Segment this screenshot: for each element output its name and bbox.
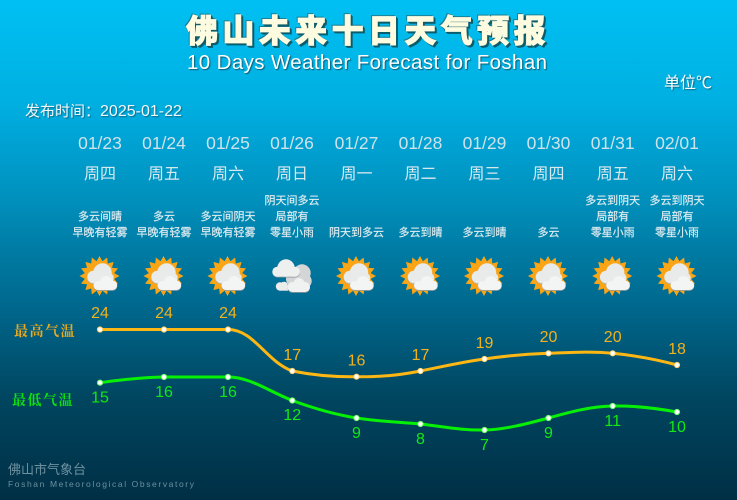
weekday: 周二	[404, 160, 437, 184]
weather description: 多云到阴天	[650, 192, 704, 208]
panel: day 5	[329, 133, 384, 296]
panel: day 4	[264, 133, 320, 293]
panel: day 10	[650, 133, 704, 296]
line chart: min temperature	[91, 374, 686, 454]
weather description: 早晚有轻雾	[200, 224, 256, 240]
min temperature values: 11	[604, 413, 621, 430]
publish time: 发布时间：2025-01-22	[25, 103, 182, 120]
weather description: 阴天到多云	[329, 224, 384, 240]
panel: day 2	[136, 133, 192, 296]
subtitle: 10 Days Weather Forecast for Foshan	[187, 51, 547, 74]
min temperature values: 16	[155, 384, 173, 401]
panel: day 6	[398, 133, 442, 296]
unit label: 单位℃	[664, 69, 712, 93]
max temperature values: 20	[540, 329, 558, 346]
weekday: 周五	[597, 160, 629, 184]
weather description: 早晚有轻雾	[72, 224, 128, 240]
panel: day 8	[527, 133, 571, 296]
weather description: 阴天间多云	[264, 192, 320, 208]
panel: day 1	[72, 133, 128, 296]
weather description: 局部有	[596, 208, 629, 224]
weather description: 局部有	[276, 208, 308, 224]
icon: sun behind cloud	[144, 256, 184, 296]
min temperature values: 16	[219, 384, 237, 401]
date: 01/25	[206, 133, 250, 153]
date: 01/27	[335, 133, 378, 153]
weather description: 多云到晴	[398, 224, 442, 240]
date: 01/29	[463, 133, 506, 153]
weekday: 周四	[532, 160, 565, 184]
date: 01/31	[591, 133, 635, 153]
weather description: 零星小雨	[655, 224, 699, 240]
min temperature curve	[100, 377, 677, 430]
weather description: 多云到晴	[462, 224, 506, 240]
panel: day 3	[200, 133, 256, 296]
icon: sun behind cloud	[336, 256, 376, 296]
weather description: 零星小雨	[591, 224, 635, 240]
max temperature values: 24	[155, 305, 173, 322]
weather description: 局部有	[660, 208, 694, 224]
max temperature values: 19	[476, 335, 494, 352]
min temperature values: 9	[544, 425, 553, 442]
label: max temperature: 最高气温	[14, 321, 76, 341]
max temperature values: 24	[219, 305, 237, 322]
date: 01/30	[527, 133, 571, 153]
panel: day 9	[585, 133, 640, 296]
min temperature values: 12	[283, 407, 301, 424]
weekday: 周日	[276, 160, 308, 184]
weekday: 周六	[661, 160, 693, 184]
max temperature values: 17	[283, 347, 301, 364]
date: 01/28	[399, 133, 442, 153]
min temperature points	[97, 374, 680, 433]
weather description: 多云到阴天	[585, 192, 640, 208]
max temperature points	[97, 327, 680, 379]
icon: sun behind cloud	[464, 256, 504, 296]
min temperature values: 9	[352, 425, 361, 442]
footer: observatory name	[8, 459, 195, 489]
weather description: 多云间阴天	[200, 208, 256, 224]
min temperature values: 8	[416, 431, 425, 448]
observatory english name: Foshan Meteorological Observatory	[8, 479, 195, 489]
title: 佛山未来十日天气预报	[186, 6, 550, 52]
max temperature values: 18	[668, 341, 686, 358]
icon: sun behind cloud	[400, 256, 440, 296]
max temperature curve	[100, 330, 677, 377]
max temperature values: 20	[604, 329, 622, 346]
icon: sun behind cloud	[656, 256, 696, 296]
weather description: 早晚有轻雾	[136, 224, 192, 240]
max temperature values: 17	[412, 347, 430, 364]
weekday: 周三	[468, 160, 501, 184]
min temperature values	[91, 384, 686, 454]
icon: sun behind cloud	[80, 256, 120, 296]
panel: day 7	[462, 133, 506, 296]
date: 01/24	[142, 133, 186, 153]
icon: sun behind cloud	[528, 256, 568, 296]
icon: overcast clouds	[272, 259, 312, 293]
max temperature values: 16	[348, 352, 366, 370]
min temperature values: 7	[480, 437, 489, 454]
max temperature values	[91, 305, 686, 370]
weekday: 周四	[84, 160, 116, 184]
date: 01/23	[78, 133, 122, 153]
weather description: 多云	[153, 208, 175, 224]
weekday: 周一	[340, 160, 373, 184]
label: min temperature: 最低气温	[12, 390, 74, 410]
weather description: 多云	[538, 224, 560, 240]
icon: sun behind cloud	[592, 256, 632, 296]
min temperature values: 15	[91, 390, 109, 406]
max temperature values: 24	[91, 305, 109, 322]
observatory chinese name: 佛山市气象台	[8, 459, 86, 478]
date: 01/26	[270, 133, 314, 153]
line chart: max temperature	[91, 305, 686, 379]
icon: sun behind cloud	[208, 256, 248, 296]
weekday: 周五	[148, 160, 180, 184]
weather description: 多云间晴	[78, 208, 122, 224]
weather description: 零星小雨	[270, 224, 314, 240]
min temperature values: 10	[668, 419, 686, 436]
date: 02/01	[655, 133, 699, 153]
weekday: 周六	[212, 160, 244, 184]
